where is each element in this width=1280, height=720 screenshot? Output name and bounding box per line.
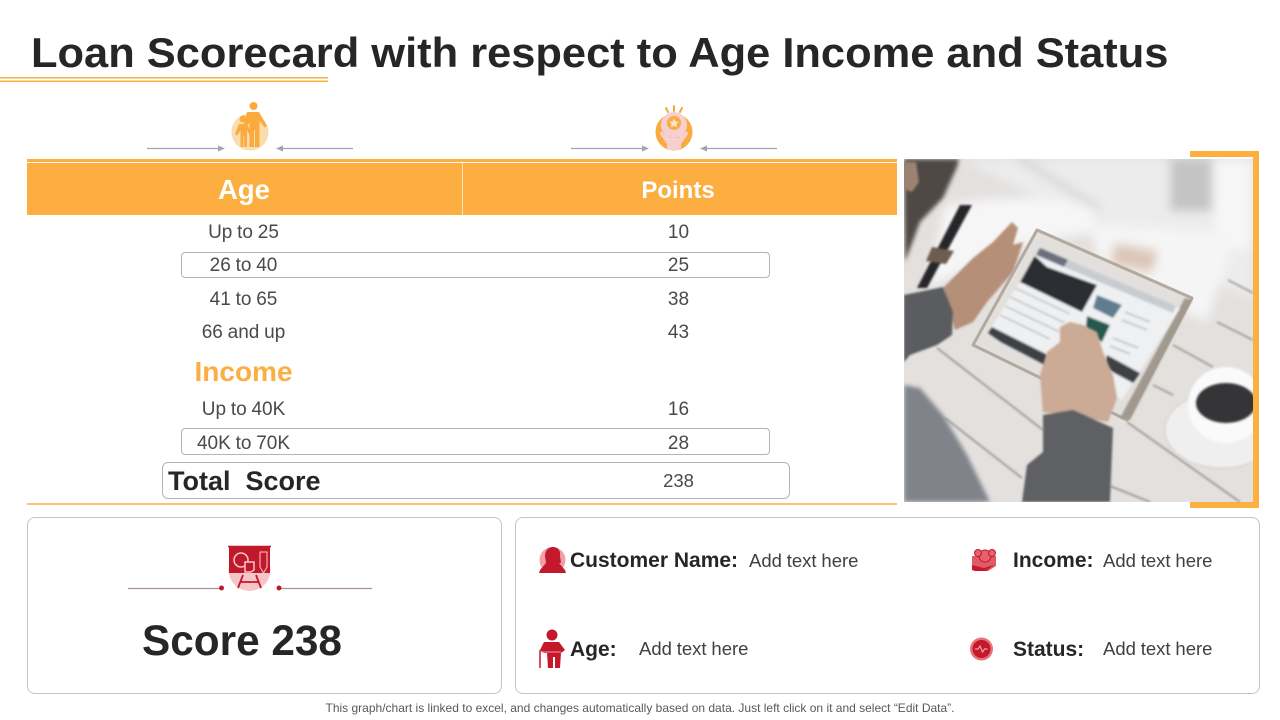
title underline [0, 77, 328, 82]
age value: Add text here [639, 638, 748, 659]
customer name label: Customer Name: [570, 549, 738, 572]
total score label: Total Score [168, 466, 321, 496]
tablet [973, 230, 1192, 420]
highlight box: 40K to 70K [181, 428, 770, 455]
header cell: Points: Points [641, 177, 715, 204]
status value: Add text here [1103, 638, 1212, 659]
table bottom rule [27, 503, 897, 504]
header divider [462, 163, 463, 215]
photo: hands using tablet at a desk [904, 159, 1253, 502]
icon: hands holding star with arrows [571, 105, 777, 152]
total score box [162, 462, 790, 499]
title: Loan Scorecard with respect to Age Income and Status [31, 29, 1168, 76]
icon: adult and child with arrows [147, 102, 353, 152]
sweater [904, 385, 990, 502]
age row 3: 41 to 65 [210, 289, 277, 310]
points row 3: 38 [668, 289, 689, 310]
income label: Income: [1013, 549, 1094, 572]
table header [27, 163, 897, 215]
income value: Add text here [1103, 550, 1212, 571]
header cell: Age: Age [218, 174, 270, 205]
income heading: Income [194, 356, 293, 387]
dark notebook strip [917, 205, 972, 288]
icon: presentation board with score rule [128, 546, 372, 591]
income row 2: 40K to 70K [197, 433, 290, 454]
points row 4: 43 [668, 322, 689, 343]
desk planks [937, 280, 1253, 502]
age row 2: 26 to 40 [210, 255, 277, 276]
icon: status pulse [970, 638, 993, 660]
right sleeve [1022, 410, 1113, 502]
left sleeve [904, 287, 953, 362]
income points row 2: 28 [668, 433, 689, 454]
tablet screen [988, 248, 1180, 400]
icon: customer [539, 547, 566, 573]
right hand [1040, 322, 1117, 422]
total score value: 238 [663, 470, 694, 491]
income points row 1: 16 [668, 399, 689, 420]
age row 1: Up to 25 [208, 222, 279, 243]
points row 1: 10 [668, 222, 689, 243]
hair and beard [904, 159, 959, 262]
left hand [943, 222, 1023, 330]
panel: customer details [515, 517, 1260, 694]
photo frame [1190, 151, 1259, 508]
table top rule [27, 159, 897, 162]
income row 1: Up to 40K [202, 399, 285, 420]
panel: score [27, 517, 502, 694]
status label: Status: [1013, 638, 1084, 661]
age row 4: 66 and up [202, 322, 285, 343]
customer name value: Add text here [749, 550, 858, 571]
highlight box: 26 to 40 [181, 252, 770, 278]
icon: income [972, 549, 996, 571]
icon: elderly person [539, 630, 565, 668]
points row 2: 25 [668, 255, 689, 276]
blurred background [927, 159, 1253, 322]
footnote: This graph/chart is linked to excel, and changes automatically based on data. Just left click on it and select “Edit Data”. [326, 701, 954, 715]
score text: Score 238 [142, 617, 342, 664]
saucer and coffee cup [1166, 402, 1253, 467]
age label: Age: [570, 638, 617, 661]
